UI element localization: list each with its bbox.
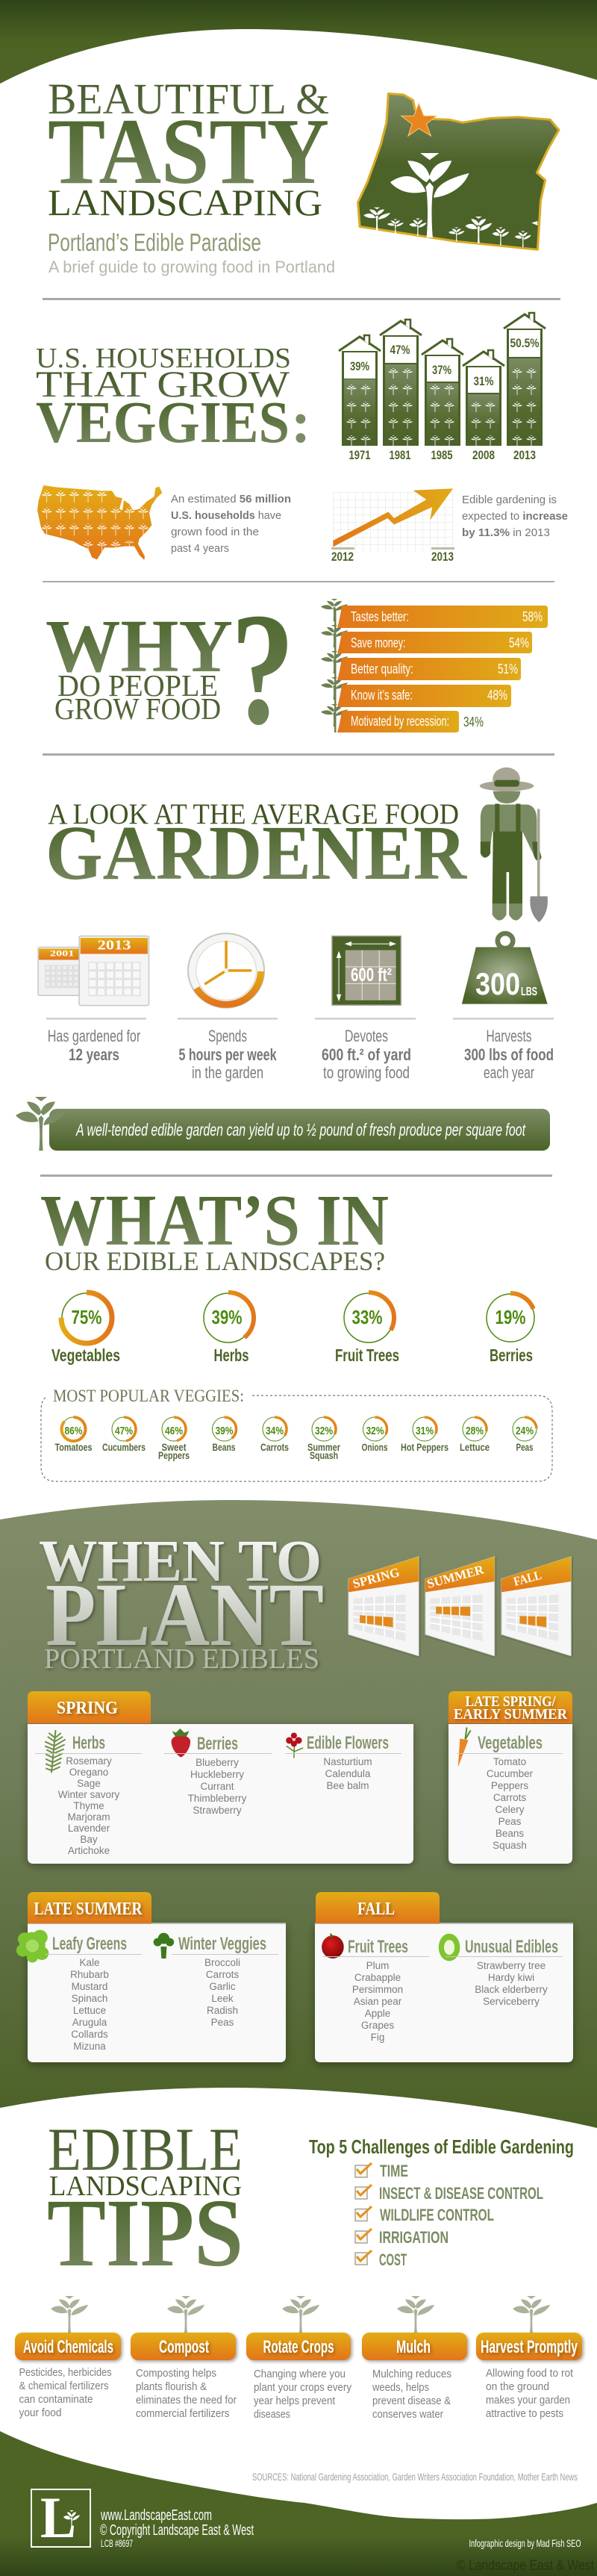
text: 56 million households: grown food in the [171, 526, 259, 538]
veggie: beans [212, 1417, 236, 1453]
tip: avoid chemicals: & chemical fertilizers [19, 2380, 109, 2392]
bar: know it's safe: 48% [487, 688, 507, 703]
challenge: wildlife: WILDLIFE CONTROL [380, 2206, 494, 2224]
tip: harvest promptly: Allowing food to rot [486, 2367, 574, 2380]
veggie: lettuce [460, 1417, 490, 1453]
donut: berries 19% [486, 1293, 535, 1365]
tip: avoid chemicals: Avoid Chemicals [23, 2337, 113, 2357]
column: berries: Thimbleberry [188, 1793, 247, 1804]
title line: tasty: TASTY [48, 100, 329, 204]
bar 2008: 31% [473, 374, 494, 388]
tip: compost: Composting helps [136, 2367, 216, 2380]
column: fruit trees: Apple [365, 2008, 390, 2019]
heading: when to plant [39, 1529, 324, 1675]
donut: berries 19%: Berries [490, 1345, 533, 1365]
column: herbs: Winter savory [58, 1789, 120, 1800]
heading: edible landscaping tips: LANDSCAPING [49, 2171, 242, 2202]
bar 1985 [422, 339, 463, 462]
stat: 12 years: 12 years [69, 1045, 119, 1064]
stat: 12 years: Has gardened for [48, 1027, 140, 1045]
column: winter veggies: Winter Veggies [178, 1934, 266, 1954]
tip: rotate crops: Rotate Crops [263, 2337, 334, 2357]
tip: mulch: conserves water [372, 2408, 443, 2421]
column: vegetables: Cucumber [487, 1768, 534, 1779]
text: expected increase: by 11.3% in 2013 [462, 526, 550, 539]
column: herbs: Rosemary [66, 1755, 112, 1767]
icon: Oregon map [358, 93, 559, 249]
tip: avoid chemicals [15, 2296, 121, 2419]
stat: 5 hours [178, 1018, 278, 1082]
footer contact text: © Copyright Landscape East & West [100, 2522, 254, 2539]
tip: rotate crops: diseases [254, 2408, 290, 2421]
stat: 600 sq ft: Devotes [345, 1027, 388, 1045]
heading: when to plant: PLANT [46, 1565, 324, 1665]
column: vegetables: Squash [493, 1840, 527, 1851]
tip: avoid chemicals: can contaminate [19, 2393, 93, 2406]
heading line 3: VEGGIES [36, 391, 290, 455]
column: vegetables [457, 1733, 563, 1851]
bar 2013: 2013 [513, 448, 536, 462]
column: winter veggies: Leek [211, 1993, 234, 2004]
bar: motivated by recession [337, 711, 484, 732]
tip: compost: commercial fertilizers [136, 2407, 230, 2420]
panel: fall [315, 1892, 573, 2062]
tab: spring [28, 1691, 151, 1723]
bar 1971 [339, 335, 381, 462]
tab: late summer [28, 1892, 151, 1923]
veggie: hot peppers [401, 1417, 448, 1453]
heading colon: : [291, 391, 310, 455]
donut: fruit trees 33%: 33% [352, 1306, 382, 1328]
tip: avoid chemicals: your food [19, 2407, 61, 2419]
column: fruit trees: Crabapple [354, 1972, 401, 1983]
icon: clock [188, 933, 264, 1008]
tip: rotate crops: Changing where you [254, 2368, 346, 2380]
challenge: irrigation: IRRIGATION [379, 2228, 448, 2247]
column: herbs: Artichoke [68, 1845, 110, 1856]
veggie: summer squash: 32% [315, 1425, 333, 1437]
icon: leafy greens [16, 1930, 49, 1962]
column: berries: Strawberry [193, 1805, 242, 1816]
bar 1981: 1981 [390, 448, 410, 462]
logo: L [40, 2485, 76, 2550]
column: fruit trees: Grapes [361, 2020, 394, 2031]
column: fruit trees: Asian pear [354, 1996, 402, 2007]
tip: mulch: weeds, helps [372, 2381, 429, 2394]
heading: what's in: OUR EDIBLE LANDSCAPES? [45, 1246, 385, 1276]
heading: why [46, 579, 295, 758]
donut: herbs 39%: 39% [212, 1306, 242, 1328]
challenge: cost [355, 2250, 407, 2269]
veggie: onions [361, 1417, 388, 1453]
icon: 300 lb weight: LBS [521, 986, 537, 998]
column: vegetables: Celery [495, 1804, 525, 1815]
icon: fall calendar [501, 1557, 571, 1656]
veggie: cucumbers: 47% [115, 1425, 133, 1437]
tip: rotate crops [246, 2296, 351, 2421]
tip: compost [131, 2296, 237, 2420]
column: vegetables: Vegetables [478, 1733, 543, 1753]
tip: avoid chemicals: Pesticides, herbicides [19, 2366, 112, 2379]
tip: rotate crops: plant your crops every [254, 2381, 351, 2394]
bar: motivated by recession: Motivated by recession: [351, 714, 449, 729]
column: leafy greens: Kale [79, 1957, 100, 1968]
tagline: A brief guide to growing food in Portland [49, 258, 335, 276]
veggie: carrots [260, 1417, 289, 1453]
text: 56 million households: An estimated 56 million [171, 493, 291, 505]
challenge: cost: COST [379, 2250, 407, 2269]
veggie: sweet peppers [158, 1417, 190, 1461]
bar: know it's safe [337, 685, 511, 707]
veggie: summer squash: Squash [310, 1449, 338, 1461]
veggie: sweet peppers: 46% [165, 1425, 183, 1437]
divider [43, 298, 560, 300]
column: leafy greens: Arugula [72, 2017, 107, 2028]
tip: harvest promptly [476, 2296, 582, 2420]
icon: 600 square feet plot [332, 936, 401, 1005]
bar 1981: 47% [390, 343, 410, 357]
column: unusual edibles: Serviceberry [483, 1996, 540, 2007]
column: winter veggies: Carrots [206, 1969, 239, 1980]
stat: 12 years [46, 1018, 146, 1064]
column: berries: Currant [200, 1781, 234, 1792]
veggie: tomatoes: Tomatoes [55, 1441, 93, 1453]
challenge: insect and disease [355, 2184, 543, 2203]
heading: edible landscaping tips [47, 2115, 243, 2287]
bar 2013: 50.5% [510, 336, 539, 350]
column: herbs: Thyme [73, 1800, 104, 1811]
plant stem [334, 609, 336, 732]
heading: edible landscaping tips: TIPS [47, 2180, 243, 2287]
column: herbs: Bay [80, 1834, 98, 1845]
stat: 600 sq ft: 600 ft.² of yard [322, 1045, 411, 1064]
bar: save money: Save money: [351, 635, 406, 650]
divider [43, 753, 554, 756]
panel: most popular veggies [41, 1387, 552, 1481]
column: leafy greens: Leafy Greens [52, 1934, 127, 1954]
panel: late spring / early summer [448, 1691, 572, 1864]
column: winter veggies [172, 1934, 278, 2028]
heading: why: ? [231, 579, 295, 758]
veggie: onions: 32% [366, 1425, 384, 1437]
tip: compost: plants flourish & [136, 2380, 207, 2393]
donut: fruit trees 33%: Fruit Trees [335, 1345, 399, 1365]
icon: calendars: 2001 [50, 949, 75, 958]
column: winter veggies: Peas [211, 2017, 234, 2028]
text: 56 million households [171, 493, 291, 555]
icon: carrot [458, 1728, 471, 1767]
chart: house bars [339, 313, 546, 462]
column: berries: Berries [197, 1734, 238, 1754]
tab: fall [316, 1892, 440, 1923]
icon: broccoli [154, 1933, 174, 1959]
bar 1971: 1971 [349, 448, 370, 462]
column: herbs [35, 1733, 142, 1856]
donut: vegetables 75%: Vegetables [51, 1345, 120, 1365]
bar: better quality: Better quality: [351, 662, 413, 676]
title line: landscaping: LANDSCAPING [48, 181, 322, 223]
stat: 300 lbs: 300 lbs of food [464, 1045, 554, 1064]
donut: berries 19%: 19% [496, 1306, 525, 1328]
bar: tastes better: Tastes better: [351, 609, 409, 624]
column: herbs: Oregano [69, 1767, 108, 1778]
tip: mulch [362, 2296, 467, 2421]
tab: fall: FALL [357, 1900, 395, 1919]
heading: average food gardener: A LOOK AT THE AVERAGE FOOD [48, 798, 459, 830]
bar: better quality [337, 658, 521, 680]
green background section [0, 1500, 597, 2128]
bar: motivated by recession: 34% [463, 715, 484, 729]
icon: spring calendar [348, 1557, 419, 1656]
bar 2013 [504, 313, 546, 462]
bar 1981 [380, 320, 422, 462]
heading: why: DO PEOPLE [57, 668, 218, 703]
column: leafy greens: Mustard [72, 1981, 107, 1992]
stat: 600 sq ft: to growing food [323, 1063, 410, 1082]
column: fruit trees: Fruit Trees [348, 1937, 408, 1957]
text: expected increase: expected to increase [462, 510, 568, 523]
column: unusual edibles: Black elderberry [475, 1984, 548, 1995]
icon: 300 lb weight [462, 933, 548, 1004]
footer contact text [100, 2507, 254, 2549]
tip: compost: Compost [159, 2337, 209, 2357]
veggie: peas: Peas [516, 1441, 534, 1453]
veggie: sweet peppers: Peppers [158, 1449, 190, 1461]
icon: 300 lb weight: 300 [475, 966, 520, 1001]
challenge: wildlife [355, 2206, 494, 2224]
divider [43, 581, 554, 582]
column: berries: Blueberry [196, 1757, 239, 1768]
column: winter veggies: Garlic [209, 1981, 236, 1992]
tab: late summer: LATE SUMMER [34, 1900, 143, 1919]
column: edible flowers: Calendula [325, 1768, 371, 1779]
callout banner [16, 1097, 550, 1151]
text: expected increase [462, 494, 568, 539]
icon: apple [322, 1933, 344, 1959]
tab: late spring [448, 1691, 572, 1723]
veggie: cucumbers [102, 1417, 146, 1453]
bar: save money [337, 632, 532, 653]
column: vegetables: Carrots [493, 1792, 526, 1803]
divider [40, 1175, 552, 1177]
heading line 1: U.S. HOUSEHOLDS [36, 343, 291, 374]
chart: rising arrow [331, 488, 454, 564]
stat: 600 sq ft [315, 1018, 416, 1082]
veggie: summer squash: Summer [307, 1441, 340, 1453]
stat: 5 hours: Spends [208, 1027, 247, 1045]
column: herbs: Lavender [68, 1823, 110, 1834]
column: berries: Huckleberry [190, 1769, 244, 1780]
heading: why: GROW FOOD [54, 691, 221, 726]
stat: 5 hours: in the garden [192, 1063, 263, 1082]
column: unusual edibles [446, 1937, 563, 2007]
heading line 2: THAT GROW [36, 363, 290, 405]
tip: mulch: Mulching reduces [372, 2368, 451, 2380]
tab: late spring: EARLY SUMMER [454, 1706, 568, 1723]
column: fruit trees: Persimmon [352, 1984, 403, 1995]
column: leafy greens: Collards [71, 2029, 108, 2040]
column: herbs: Marjoram [67, 1811, 110, 1823]
logo [31, 2485, 90, 2550]
footer green curve [0, 2431, 597, 2576]
bar: know it's safe: Know it’s safe: [351, 688, 413, 703]
column: edible flowers [285, 1733, 401, 1791]
text: expected increase: Edible gardening is [462, 494, 557, 506]
donut: vegetables 75%: 75% [72, 1306, 101, 1328]
tip: compost: eliminates the need for [136, 2394, 237, 2407]
icon: fall calendar: FALL [512, 1568, 543, 1589]
tab: spring: SPRING [57, 1699, 118, 1718]
donut: herbs 39%: Herbs [213, 1345, 249, 1365]
veggie: lettuce: 28% [466, 1425, 484, 1437]
heading: US households [36, 343, 310, 455]
stat: 300 lbs [453, 1018, 554, 1082]
veggie: carrots: Carrots [260, 1441, 289, 1453]
text: 56 million households: U.S. households have [171, 509, 281, 522]
chart: rising arrow: 2012 [331, 550, 354, 564]
icon: Portland star [401, 103, 437, 136]
tip: harvest promptly: makes your garden [486, 2394, 570, 2407]
label: 600 ft²: 600 ft² [351, 965, 392, 986]
bar 1985: 37% [432, 363, 451, 377]
column: berries [164, 1734, 272, 1816]
title line: beautiful: BEAUTIFUL & [48, 75, 329, 123]
column: vegetables: Tomato [493, 1756, 526, 1767]
footer contact text: LCB #8697 [101, 2537, 133, 2549]
veggie: tomatoes [55, 1417, 93, 1453]
icon: gardener figure [480, 768, 548, 922]
icon: rosemary [45, 1730, 66, 1773]
chart: reasons bars [321, 599, 548, 732]
column: edible flowers: Nasturtium [323, 1756, 372, 1767]
bar: tastes better [337, 606, 548, 628]
heading: when to plant: WHEN TO [39, 1529, 322, 1594]
column: fruit trees [322, 1937, 429, 2043]
panel: late summer [16, 1892, 286, 2062]
heading: average food gardener: GARDENER [46, 810, 468, 896]
bar 2008 [463, 350, 504, 462]
veggie: carrots: 34% [266, 1425, 284, 1437]
icon: USA map [37, 485, 162, 560]
column: unusual edibles: Hardy kiwi [488, 1972, 534, 1983]
tab: late spring: LATE SPRING/ [466, 1693, 556, 1710]
veggie: beans: 39% [215, 1425, 233, 1437]
column: herbs: Sage [77, 1778, 101, 1789]
bar: save money: 54% [509, 635, 529, 650]
veggie: hot peppers: 31% [416, 1425, 434, 1437]
panel title: MOST POPULAR VEGGIES: [53, 1387, 244, 1405]
donut: fruit trees 33% [335, 1292, 399, 1365]
donut: vegetables 75% [51, 1292, 120, 1365]
column: winter veggies: Radish [207, 2005, 238, 2016]
veggie: peas [513, 1417, 537, 1453]
top green banner curve [0, 0, 597, 84]
heading: edible landscaping tips: EDIBLE [48, 2115, 243, 2183]
heading: what's in: WHAT’S IN [40, 1180, 389, 1260]
column: herbs: Herbs [72, 1733, 105, 1753]
column: vegetables: Peas [498, 1816, 522, 1827]
title [48, 75, 329, 223]
heading: why: WHY [46, 604, 233, 688]
tip: rotate crops: year helps prevent [254, 2395, 336, 2407]
tip: mulch: prevent disease & [372, 2395, 451, 2407]
heading: when to plant: PORTLAND EDIBLES [44, 1643, 319, 1675]
veggie: peas: 24% [516, 1425, 534, 1437]
bar: better quality: 51% [498, 662, 518, 676]
panel: spring [28, 1691, 413, 1864]
icon: strawberry [172, 1729, 190, 1757]
text: 56 million households: past 4 years [171, 542, 229, 555]
column: vegetables: Peppers [491, 1780, 528, 1791]
bar 1985: 1985 [431, 448, 452, 462]
tip: harvest promptly: on the ground [486, 2380, 549, 2393]
stat: 300 lbs: Harvests [487, 1027, 531, 1045]
veggie: beans: Beans [212, 1441, 236, 1453]
veggie: onions: Onions [361, 1441, 388, 1453]
column: edible flowers: Bee balm [326, 1780, 369, 1791]
footer contact text: www.LandscapeEast.com [100, 2507, 212, 2524]
challenge: time [355, 2162, 408, 2180]
veggie: tomatoes: 86% [64, 1425, 82, 1437]
donut: herbs 39% [203, 1292, 254, 1365]
icon: calendars: 2013 [98, 938, 131, 952]
icon: spring calendar: SPRING [351, 1565, 401, 1591]
column: leafy greens: Spinach [72, 1993, 107, 2004]
icon: summer calendar [425, 1557, 495, 1656]
bar 2008: 2008 [472, 448, 495, 462]
bar 1971: 39% [350, 359, 369, 373]
tip: mulch: Mulch [396, 2337, 431, 2357]
column: leafy greens: Mizuna [73, 2041, 106, 2052]
icon: summer calendar: SUMMER [425, 1562, 486, 1591]
chart: rising arrow: 2013 [431, 550, 454, 564]
veggie: cucumbers: Cucumbers [102, 1441, 146, 1453]
veggie: summer squash [307, 1417, 340, 1461]
icon: calendars [38, 936, 149, 1006]
veggie: hot peppers: Hot Peppers [401, 1441, 448, 1453]
stat: 5 hours: 5 hours per week [179, 1045, 277, 1064]
column: unusual edibles: Strawberry tree [477, 1960, 546, 1971]
challenge: irrigation [355, 2228, 448, 2247]
veggie: sweet peppers: Sweet [161, 1441, 187, 1453]
column: fruit trees: Fig [371, 2032, 384, 2043]
column: vegetables: Beans [496, 1828, 524, 1839]
column: leafy greens [46, 1934, 142, 2052]
column: edible flowers: Edible Flowers [307, 1733, 389, 1753]
column: fruit trees: Plum [366, 1960, 389, 1971]
bar: tastes better: 58% [522, 609, 543, 624]
veggie: lettuce: Lettuce [460, 1441, 490, 1453]
column: winter veggies: Broccoli [204, 1957, 240, 1968]
icon: edible flower [286, 1732, 303, 1758]
stat: 300 lbs: each year [484, 1063, 534, 1082]
column: leafy greens: Lettuce [73, 2005, 106, 2016]
panel: top 5 challenges [309, 2135, 574, 2269]
icon: kiwi [439, 1934, 460, 1961]
subtitle: Portland’s Edible Paradise [48, 228, 261, 256]
challenge: time: TIME [380, 2162, 408, 2180]
tip: harvest promptly: attractive to pests [486, 2407, 563, 2420]
column: leafy greens: Rhubarb [70, 1969, 109, 1980]
